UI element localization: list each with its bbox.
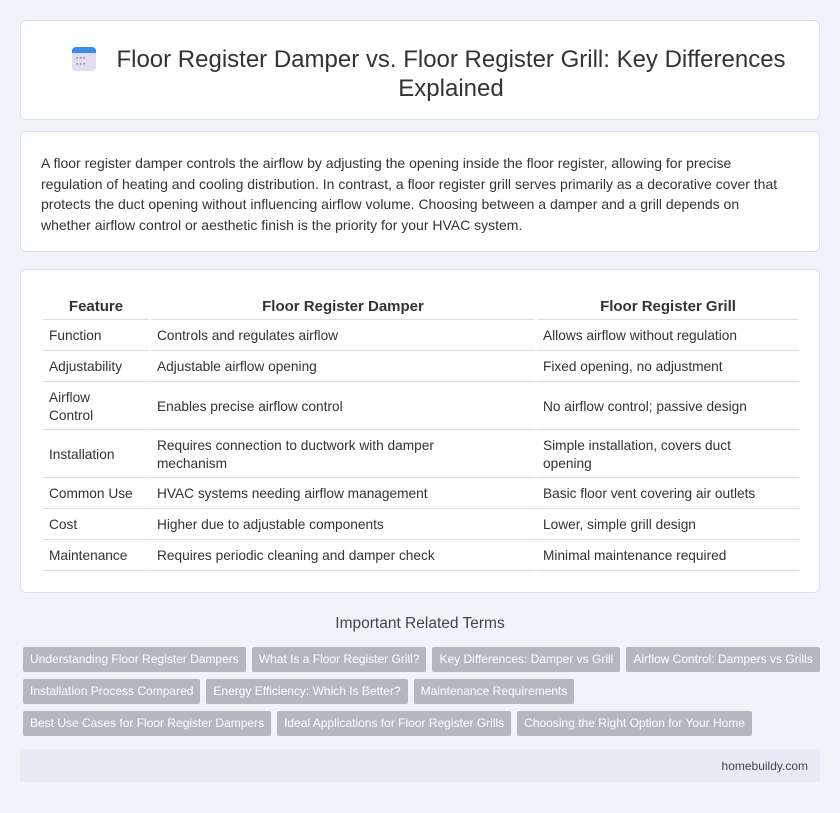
comparison table: Common Use xyxy=(49,486,133,501)
comparison table: Floor Register Grill xyxy=(600,298,736,315)
comparison table: Feature xyxy=(69,298,123,315)
comparison table: Requires connection to ductwork with damper mechanism xyxy=(157,438,434,470)
header card xyxy=(20,20,820,120)
comparison table: Enables precise airflow control xyxy=(157,398,343,414)
comparison table: Function xyxy=(49,328,102,343)
tags: Maintenance Requirements xyxy=(421,684,567,698)
comparison table: Fixed opening, no adjustment xyxy=(543,359,723,374)
intro text: A floor register damper controls the airflow by adjusting the opening inside the floor register, allowing for precise regulation of heating and cooling distribution. In contrast, a floor register grill serves primarily as a decorative cover that protects the duct opening without influencing airflow volume. Choosing between a damper and a grill depends on whether airflow control or aesthetic finish is the priority for your HVAC system. xyxy=(41,155,777,232)
tags: Key Differences: Damper vs Grill xyxy=(439,652,613,666)
tags: Choosing the Right Option for Your Home xyxy=(524,716,745,730)
intro text xyxy=(20,131,820,252)
comparison table: Requires periodic cleaning and damper check xyxy=(157,548,435,563)
tags: Energy Efficiency: Which Is Better? xyxy=(213,684,401,698)
comparison table: HVAC systems needing airflow management xyxy=(157,486,428,501)
tags: Best Use Cases for Floor Register Dampers xyxy=(30,716,264,730)
comparison table: Lower, simple grill design xyxy=(543,517,696,532)
tags: Ideal Applications for Floor Register Grills xyxy=(284,716,504,730)
comparison table: Cost xyxy=(49,517,77,532)
comparison table: Controls and regulates airflow xyxy=(157,328,338,343)
icon: calendar: ▪▪▪ xyxy=(76,55,86,62)
comparison table: Basic floor vent covering air outlets xyxy=(543,486,755,501)
comparison table: Allows airflow without regulation xyxy=(543,328,737,343)
tags: What Is a Floor Register Grill? xyxy=(259,652,419,666)
comparison table: Floor Register Damper xyxy=(262,298,424,315)
comparison table: Adjustable airflow opening xyxy=(157,359,317,374)
comparison table: Airflow Control xyxy=(49,390,93,422)
tags: Airflow Control: Dampers vs Grills xyxy=(633,652,813,666)
icon: calendar: ▪▪▪ xyxy=(76,61,86,68)
icon: calendar xyxy=(72,47,96,71)
comparison table: Minimal maintenance required xyxy=(543,548,726,563)
comparison table xyxy=(20,269,820,593)
comparison table: No airflow control; passive design xyxy=(543,398,747,414)
comparison table: Higher due to adjustable components xyxy=(157,517,384,532)
comparison table: Adjustability xyxy=(49,359,122,374)
tags: Installation Process Compared xyxy=(30,684,193,698)
related terms heading: Important Related Terms xyxy=(335,615,505,632)
tags: Understanding Floor Register Dampers xyxy=(30,652,239,666)
comparison table: Maintenance xyxy=(49,548,127,563)
tags xyxy=(23,647,820,736)
comparison table: Simple installation, covers duct opening xyxy=(543,438,731,470)
title: Floor Register Damper vs. Floor Register Grill: Key Differences Explained xyxy=(116,46,786,102)
footer xyxy=(20,749,820,782)
footer: homebuildy.com xyxy=(722,759,808,773)
comparison table: Installation xyxy=(49,446,114,462)
